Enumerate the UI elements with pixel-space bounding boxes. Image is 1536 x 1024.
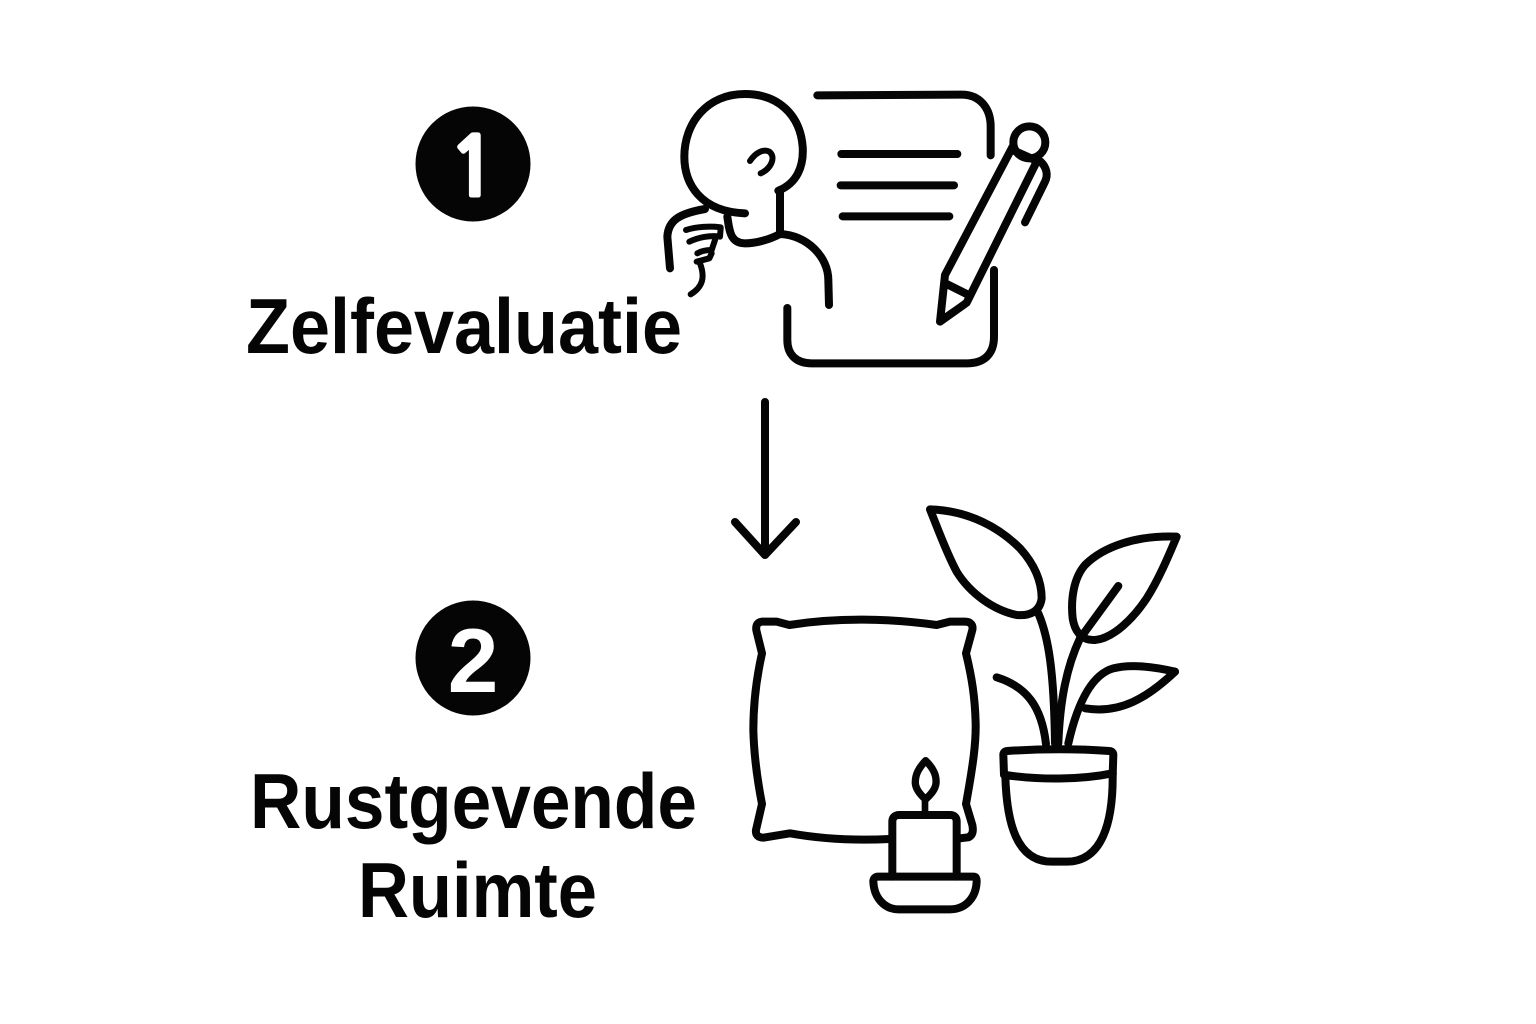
step 2 heading: Rustgevende bbox=[250, 757, 697, 845]
pillow bbox=[753, 620, 976, 840]
step 1 number badge: 1 bbox=[448, 128, 498, 209]
icon: pillow, candle and plant bbox=[753, 509, 1177, 909]
icon: person thinking with document and pencil bbox=[667, 94, 1047, 363]
step 1 heading: Zelfevaluatie bbox=[246, 282, 682, 370]
ear bbox=[750, 151, 772, 173]
hand fingers bbox=[686, 227, 721, 294]
step 2 heading: Ruimte bbox=[358, 846, 597, 934]
plant leaves and stems bbox=[930, 509, 1177, 744]
arm bbox=[667, 209, 705, 268]
neck and chin bbox=[727, 191, 780, 243]
step 2 number badge: 2 bbox=[448, 611, 498, 712]
plant pot bbox=[1003, 749, 1113, 862]
person head bbox=[684, 94, 803, 213]
step 2 heading bbox=[250, 757, 697, 934]
step 1 number badge bbox=[416, 106, 530, 222]
pencil bbox=[940, 126, 1047, 322]
document outline bbox=[787, 95, 994, 363]
arrow down bbox=[735, 402, 796, 555]
document text lines bbox=[841, 154, 957, 216]
candle bbox=[873, 761, 977, 909]
step 2 number badge bbox=[416, 600, 530, 716]
shoulder bbox=[780, 234, 829, 305]
